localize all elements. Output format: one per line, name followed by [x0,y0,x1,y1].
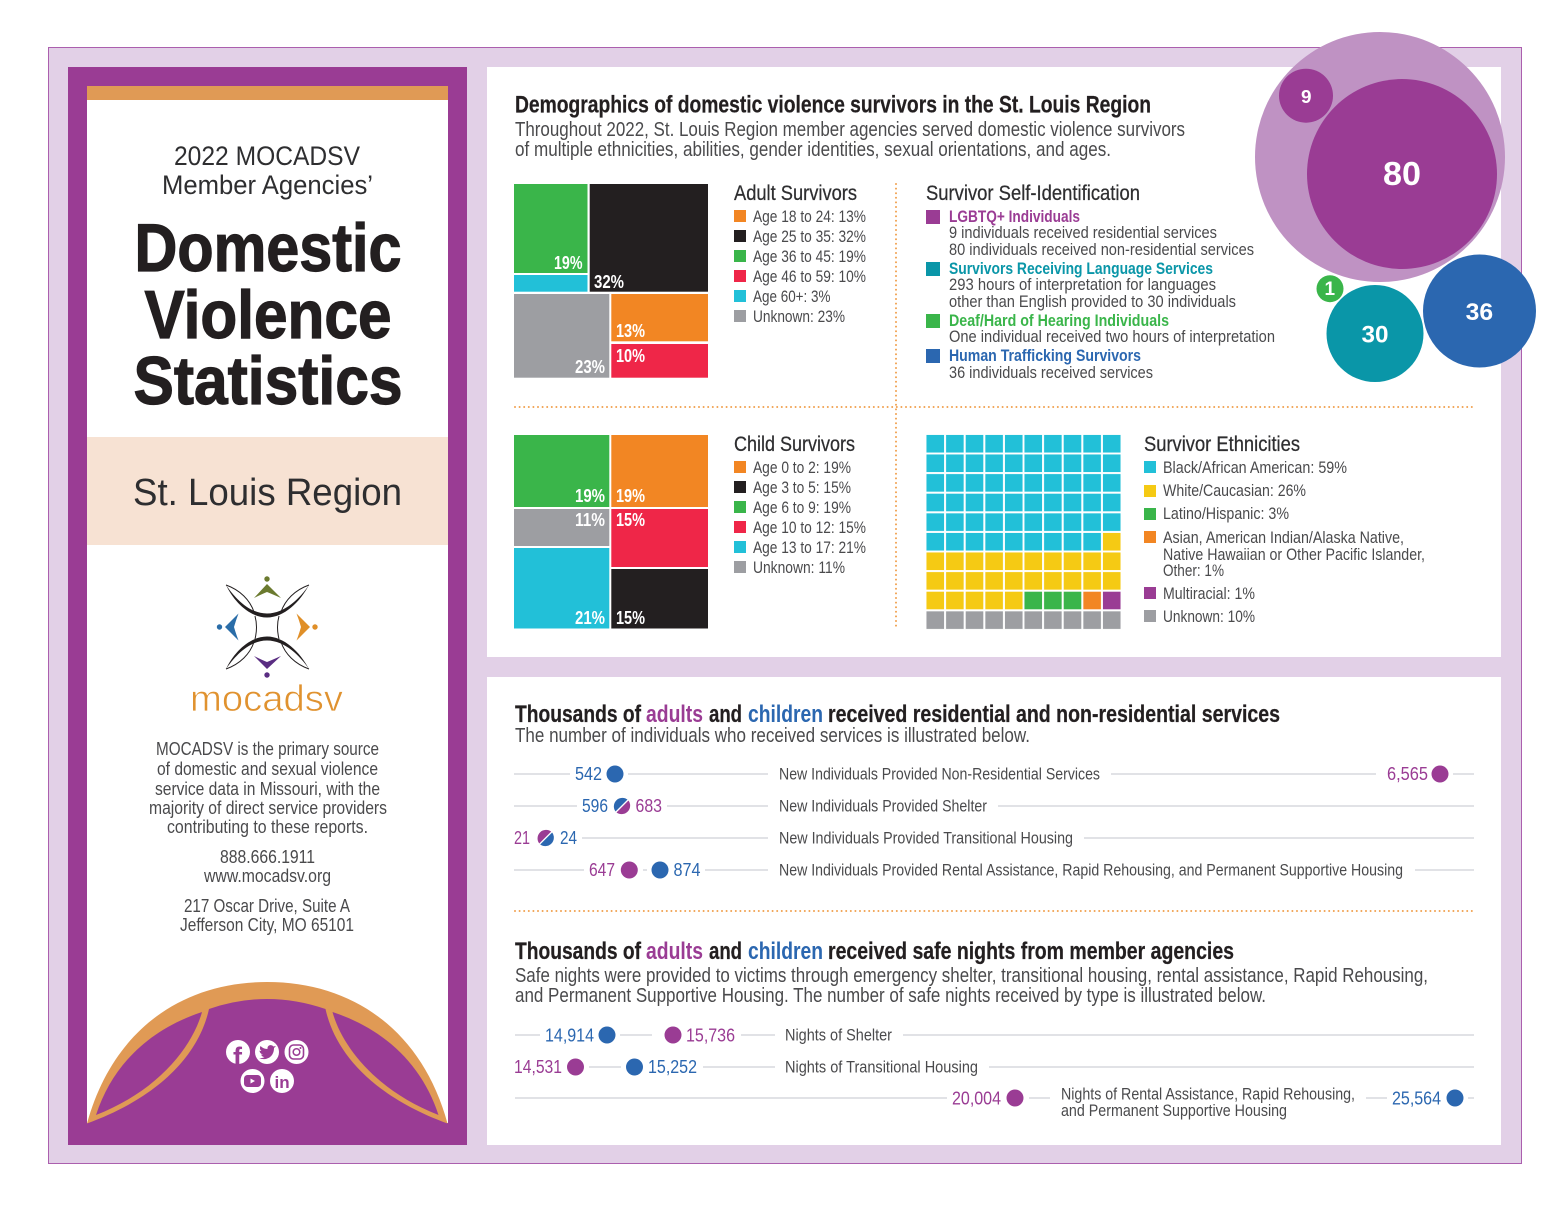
treemap: adult survivors: 13% [616,321,645,341]
bubble: residential 9 [1279,69,1333,123]
bubble: residential 9: 9 [1301,87,1312,107]
sidebar intro [162,141,373,200]
about text: contributing to these reports. [167,817,368,837]
bubble: LGBTQ+ total [1255,32,1505,282]
services intro: The number of individuals who received services is illustrated below. [515,725,1030,747]
legend: child survivors: Age 3 to 5: 15% [753,478,851,497]
safe nights heading: and [709,938,742,965]
item: deaf/hard of hearing: One individual received two hours of interpretation [949,327,1275,346]
row: transitional housing: New Individuals Provided Transitional Housing [779,828,1073,848]
item: language services: Survivors Receiving Language Services [949,259,1213,278]
sidebar title: Statistics [134,343,402,419]
safe nights intro: and Permanent Supportive Housing. The number of safe nights received by type is illustrated below. [515,985,1266,1007]
icon: instagram [284,1040,308,1064]
row: transitional housing [514,828,1474,848]
services heading: adults [646,701,703,728]
legend: adult survivors: Unknown: 23% [753,307,845,326]
demographics intro: of multiple ethnicities, abilities, gender identities, sexual orientations, and ages. [515,139,1111,161]
sidebar intro: Member Agencies’ [162,170,373,200]
legend: survivor ethnicities: Other: 1% [1163,561,1224,580]
item: language services [926,259,1236,311]
row: nights of rental assistance: Nights of Rental Assistance, Rapid Rehousing, [1061,1084,1355,1104]
legend: survivor ethnicities: Unknown: 10% [1163,607,1255,626]
about text: MOCADSV is the primary source [156,739,379,759]
sidebar title: Violence [144,277,392,353]
safe nights heading [515,938,1234,965]
row: nights of transitional housing: 14,531 [514,1057,562,1077]
icon: linkedin: in [274,1073,290,1092]
item: human trafficking [926,346,1153,382]
legend: child survivors: Age 0 to 2: 19% [753,458,851,477]
demographics intro [515,119,1185,161]
row: rental assistance: 874 [674,860,700,880]
contact details: 217 Oscar Drive, Suite A [184,896,350,916]
contact details: Jefferson City, MO 65101 [180,915,354,935]
item: human trafficking: Human Trafficking Survivors [949,346,1141,365]
contact details: www.mocadsv.org [203,866,331,886]
sidebar intro: 2022 MOCADSV [174,141,360,171]
row: nights of rental assistance: 25,564 [1392,1088,1441,1108]
panel: services [487,677,1501,1145]
panel: demographics [487,67,1501,657]
row: nights of transitional housing [514,1057,1474,1077]
row: nights of rental assistance: and Permanent Supportive Housing [1061,1101,1287,1120]
treemap: child survivors: 15% [616,608,645,628]
row: nights of rental assistance: 20,004 [952,1088,1001,1108]
row: shelter: 683 [636,796,662,816]
legend: child survivors [734,433,866,577]
demographics intro: Throughout 2022, St. Louis Region member agencies served domestic violence survivors [515,119,1185,141]
contact details [180,847,354,935]
treemap: child survivors: 19% [616,486,645,506]
sidebar title [134,210,402,419]
legend: adult survivors: Adult Survivors [734,182,857,205]
bubble: human trafficking 36 [1423,254,1536,368]
row: nights of rental assistance [515,1084,1474,1120]
row: non-residential services: New Individuals Provided Non-Residential Services [779,764,1100,784]
treemap: adult survivors: 32% [594,272,624,292]
bubble: language services 30 [1326,285,1424,382]
icon: twitter [255,1040,279,1064]
treemap: child survivors: 15% [616,510,645,530]
services heading: and [709,701,742,728]
safe nights heading: received safe nights from member agencies [828,938,1234,965]
row: transitional housing: 21 [514,828,530,848]
treemap: adult survivors: 10% [616,346,645,366]
item: language services: 293 hours of interpretation for languages [949,275,1216,294]
item: LGBTQ+ [926,207,1254,259]
row: non-residential services [514,764,1474,784]
demographics heading: Demographics of domestic violence survivors in the St. Louis Region [515,92,1151,118]
waffle chart: survivor ethnicities [926,435,1121,629]
item: deaf/hard of hearing [926,311,1275,346]
bubble: non-residential 80 [1307,79,1497,269]
row: non-residential services: 6,565 [1387,764,1428,784]
icon: facebook: f [233,1042,243,1072]
row: rental assistance [514,860,1474,880]
item: LGBTQ+: 80 individuals received non-residential services [949,240,1254,259]
row: rental assistance: 647 [589,860,615,880]
region band: St. Louis Region [133,472,402,514]
region band [87,437,448,545]
treemap: child survivors: 11% [575,510,605,530]
self-identification block: Survivor Self-Identification [926,182,1140,205]
legend: child survivors: Age 10 to 12: 15% [753,518,866,537]
legend: adult survivors: Age 46 to 59: 10% [753,267,866,286]
about text: of domestic and sexual violence [157,759,378,779]
legend: adult survivors: Age 25 to 35: 32% [753,227,866,246]
safe nights heading: Thousands of [515,938,642,965]
legend: adult survivors: Age 18 to 24: 13% [753,207,866,226]
icons: social media [226,1040,308,1093]
item: language services: other than English provided to 30 individuals [949,292,1236,311]
legend: adult survivors [734,182,866,326]
treemap: adult survivors: 19% [554,253,582,273]
safe nights heading: children [748,938,823,965]
row: nights of transitional housing: Nights of Transitional Housing [785,1058,978,1076]
about text [149,739,387,837]
services heading: Thousands of [515,701,642,728]
row: nights of shelter: 14,914 [545,1026,594,1046]
legend: child survivors: Child Survivors [734,433,855,456]
legend: survivor ethnicities [1144,433,1425,626]
item: deaf/hard of hearing: Deaf/Hard of Hearing Individuals [949,311,1169,330]
item: LGBTQ+: 9 individuals received residential services [949,223,1217,242]
legend: survivor ethnicities: Asian, American Indian/Alaska Native, [1163,528,1404,547]
icon: youtube [240,1069,264,1093]
services heading: received residential and non-residential services [828,701,1280,728]
legend: survivor ethnicities: Multiracial: 1% [1163,584,1255,603]
legend: child survivors: Unknown: 11% [753,558,845,577]
bubble: deaf/hard of hearing 1 [1316,275,1344,302]
legend: child survivors: Age 6 to 9: 19% [753,498,851,517]
row: nights of shelter [515,1026,1474,1046]
treemap: child survivors: 19% [575,486,605,506]
bubble: non-residential 80: 80 [1383,155,1421,192]
panel: left sidebar [68,67,467,1145]
legend: survivor ethnicities: Black/African American: 59% [1163,458,1347,477]
dome graphic [87,982,448,1130]
contact details: 888.666.1911 [220,847,315,867]
row: shelter [514,796,1474,816]
treemap: adult survivors: 23% [575,357,605,377]
legend: survivor ethnicities: White/Caucasian: 26% [1163,481,1306,500]
bubble: deaf/hard of hearing 1: 1 [1324,279,1336,300]
row: rental assistance: New Individuals Provided Rental Assistance, Rapid Rehousing, and Permanent Supportive Housing [779,860,1403,880]
legend: adult survivors: Age 60+: 3% [753,287,830,306]
self-identification block [926,182,1275,382]
row: shelter: New Individuals Provided Shelter [779,796,987,816]
logo wordmark: mocadsv [190,678,344,719]
bubble chart: survivor self-identification [1255,32,1536,382]
row: non-residential services: 542 [575,764,602,784]
icon: mocadsv logo [217,576,318,678]
treemap: adult survivors [514,184,708,378]
about text: service data in Missouri, with the [155,779,380,799]
about text: majority of direct service providers [149,798,387,818]
legend: survivor ethnicities: Native Hawaiian or Other Pacific Islander, [1163,545,1425,564]
row: nights of shelter: 15,736 [686,1026,735,1046]
item: human trafficking: 36 individuals received services [949,363,1153,382]
bubble: language services 30: 30 [1362,322,1388,349]
row: nights of shelter: Nights of Shelter [785,1026,892,1044]
row: transitional housing: 24 [560,828,577,848]
legend: adult survivors: Age 36 to 45: 19% [753,247,866,266]
safe nights heading: adults [646,938,703,965]
safe nights intro [515,965,1428,1007]
legend: survivor ethnicities: Latino/Hispanic: 3% [1163,504,1289,523]
services heading: children [748,701,823,728]
treemap: child survivors: 21% [575,608,605,628]
treemap: child survivors [514,435,708,628]
sidebar title: Domestic [134,210,402,286]
legend: survivor ethnicities: Survivor Ethnicities [1144,433,1300,456]
services heading [515,701,1280,728]
row: nights of transitional housing: 15,252 [648,1057,697,1077]
item: LGBTQ+: LGBTQ+ Individuals [949,207,1080,226]
bubble: human trafficking 36: 36 [1466,299,1493,326]
legend: child survivors: Age 13 to 17: 21% [753,538,866,557]
row: shelter: 596 [582,796,608,816]
safe nights intro: Safe nights were provided to victims through emergency shelter, transitional housing, rental assistance, Rapid Rehousing, [515,965,1428,987]
